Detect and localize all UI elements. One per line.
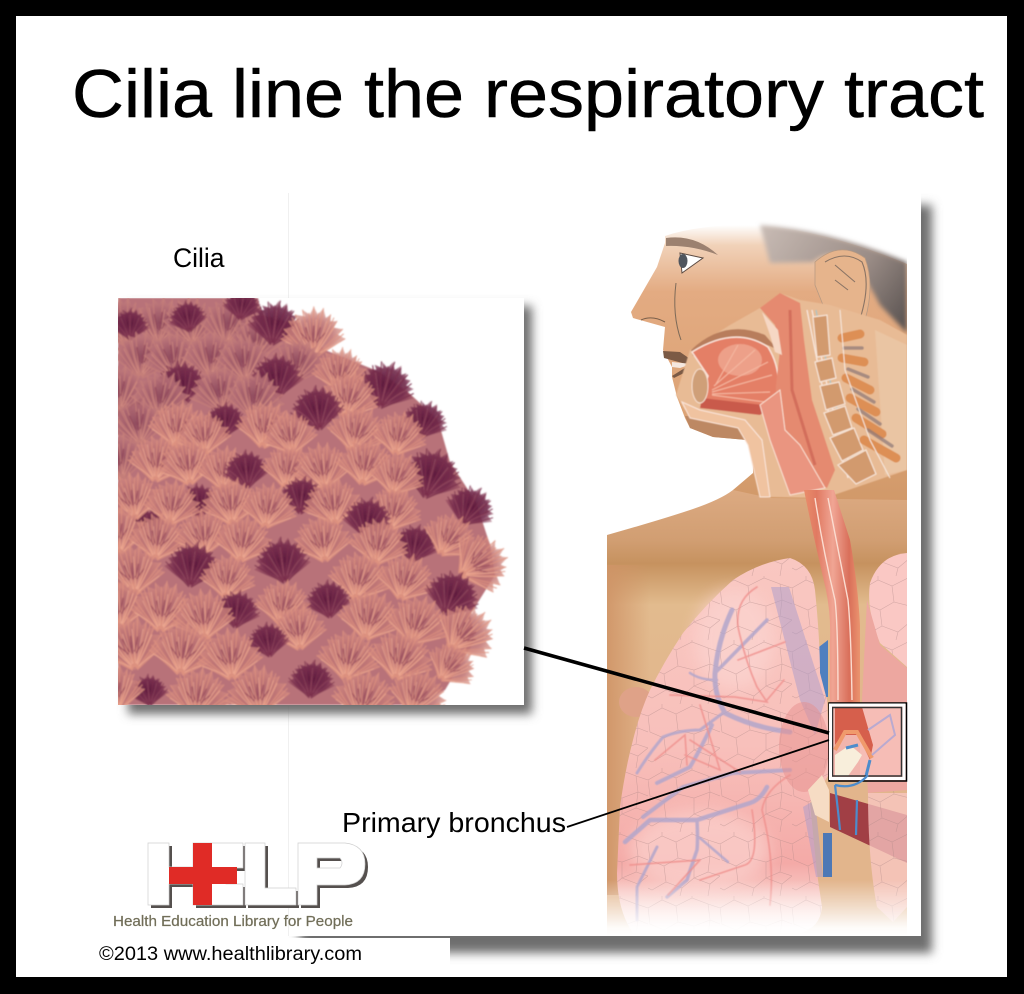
cord lines <box>807 310 853 478</box>
tongue <box>692 337 778 408</box>
logo: HELP <box>148 843 368 908</box>
mouth floor <box>700 398 772 415</box>
head <box>631 225 907 500</box>
cilia illustration <box>80 286 520 726</box>
neck cross-section <box>676 293 907 498</box>
copyright: ©2013 www.healthlibrary.com <box>99 944 362 965</box>
spinal cord edge <box>840 310 890 478</box>
right-side tissue <box>860 707 902 776</box>
callout: primary bronchus label: Primary bronchus <box>342 807 566 838</box>
cilia tufts <box>80 286 520 726</box>
blue vessel in inset <box>846 745 870 776</box>
nipple bump <box>619 687 653 717</box>
blue vessel upper <box>815 640 828 697</box>
small vessels <box>868 715 895 755</box>
hilum fatty spot <box>808 775 829 822</box>
process 4 <box>850 398 876 412</box>
blue vessels below inset <box>835 775 868 835</box>
bronchus <box>835 707 873 760</box>
bottom fade <box>600 880 921 936</box>
inset inner frame <box>832 708 902 776</box>
logo tagline: Health Education Library for People <box>113 914 353 930</box>
panel: anatomy card <box>288 193 921 936</box>
cervical vertebrae <box>813 315 876 484</box>
aortic band <box>830 793 907 863</box>
translucent vein trunk upper <box>771 587 825 735</box>
blue vessel lower <box>823 833 832 877</box>
hair <box>760 225 907 333</box>
leader line: cilia to inset <box>524 648 829 733</box>
nostril <box>641 318 665 322</box>
spinous processes <box>842 334 896 458</box>
interspinous shading <box>844 348 892 446</box>
chest and shoulders <box>607 470 907 936</box>
trachea <box>804 490 860 710</box>
pharynx shading <box>790 310 815 465</box>
tongue muscle fibres <box>712 345 772 402</box>
hilum mass <box>779 702 829 792</box>
inset frame <box>829 703 906 781</box>
veins <box>625 610 790 920</box>
process 1 <box>842 334 860 338</box>
lower lip <box>672 368 685 378</box>
vertebra 5 <box>830 428 863 461</box>
logo letter shadow <box>151 846 368 908</box>
vertebra 1 <box>813 315 830 357</box>
process 6 <box>864 440 896 458</box>
vertebra 4 <box>824 406 852 435</box>
logo red cross <box>169 843 237 905</box>
jaw bone <box>692 369 708 403</box>
left side chest shading <box>607 575 640 895</box>
panel shadow <box>300 205 932 953</box>
process 5 <box>856 418 882 434</box>
ear folds <box>824 256 867 315</box>
cilia box shadow <box>128 306 532 714</box>
translucent vein trunk lower <box>803 800 823 877</box>
epiglottis and larynx <box>760 390 825 495</box>
section background <box>676 293 907 498</box>
inset white band <box>830 705 904 778</box>
pharynx <box>760 293 835 488</box>
soft palate band <box>691 329 778 356</box>
bronchus wall <box>835 732 872 758</box>
inset: primary bronchus detail <box>829 703 906 781</box>
teeth <box>672 362 686 368</box>
eye <box>680 253 703 273</box>
cilia base mass <box>118 298 495 705</box>
lung highlight lower <box>630 810 770 890</box>
iris <box>678 254 688 268</box>
vertebra 6 <box>838 450 876 484</box>
callout: cilia label: Cilia <box>173 243 225 273</box>
ear <box>814 250 870 316</box>
under-chin shading <box>685 416 747 440</box>
vertebra 3 <box>820 382 845 410</box>
title: Cilia line the respiratory tract <box>72 56 984 132</box>
panel: cilia close-up <box>80 286 524 726</box>
vertebra 2 <box>815 358 836 382</box>
chin tissue <box>682 402 770 497</box>
upper lip <box>663 351 688 364</box>
right lung <box>862 553 907 922</box>
left lung <box>617 558 830 933</box>
cartilage <box>835 745 862 776</box>
uvula <box>762 312 782 355</box>
skin of face and neck <box>631 225 907 500</box>
footer white strip <box>16 938 450 977</box>
cheek line <box>675 283 681 340</box>
cell texture <box>617 558 830 933</box>
textured tissue behind spine <box>875 330 907 475</box>
process 3 <box>846 378 870 390</box>
spine line <box>815 310 853 457</box>
eyebrow <box>666 237 718 255</box>
process 2 <box>842 358 864 362</box>
leader line: primary bronchus <box>567 740 829 827</box>
arteries <box>630 587 790 905</box>
anatomy illustration <box>600 225 921 936</box>
logo letters <box>148 843 365 905</box>
tongue highlight <box>718 344 762 376</box>
lung highlight upper <box>695 590 775 690</box>
